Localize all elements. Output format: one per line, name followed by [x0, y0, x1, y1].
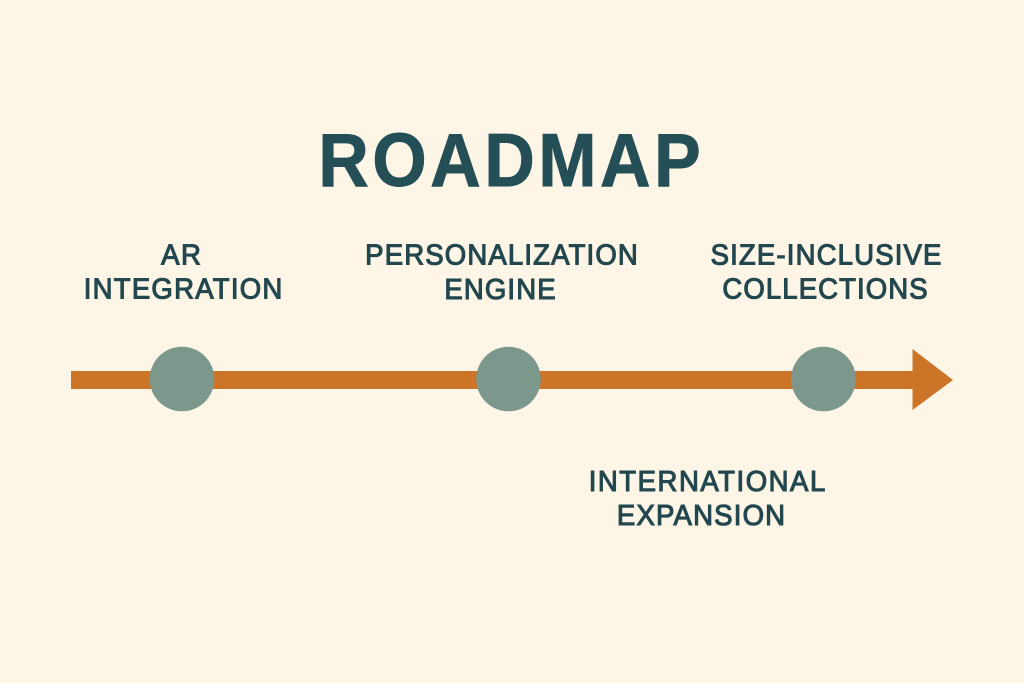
label: Size-Inclusive Collections: COLLECTIONS	[722, 272, 928, 305]
label: Size-Inclusive Collections	[711, 238, 941, 305]
label: Personalization Engine: PERSONALIZATION	[365, 238, 638, 271]
label: Personalization Engine	[365, 238, 638, 305]
label: AR Integration	[84, 238, 282, 305]
milestone: Personalization Engine	[476, 347, 541, 411]
milestone: Size-Inclusive Collections	[791, 347, 856, 411]
label: International Expansion	[589, 464, 825, 531]
timeline arrow	[71, 349, 953, 410]
label: Personalization Engine: ENGINE	[444, 272, 556, 305]
label: Size-Inclusive Collections: SIZE-INCLUSIVE	[711, 238, 941, 271]
label: International Expansion: INTERNATIONAL	[589, 464, 825, 497]
label: AR Integration: AR	[161, 238, 201, 271]
title: ROADMAP	[318, 119, 701, 203]
milestone: AR Integration	[150, 347, 214, 411]
label: AR Integration: INTEGRATION	[84, 272, 282, 305]
label: International Expansion: EXPANSION	[617, 498, 785, 531]
